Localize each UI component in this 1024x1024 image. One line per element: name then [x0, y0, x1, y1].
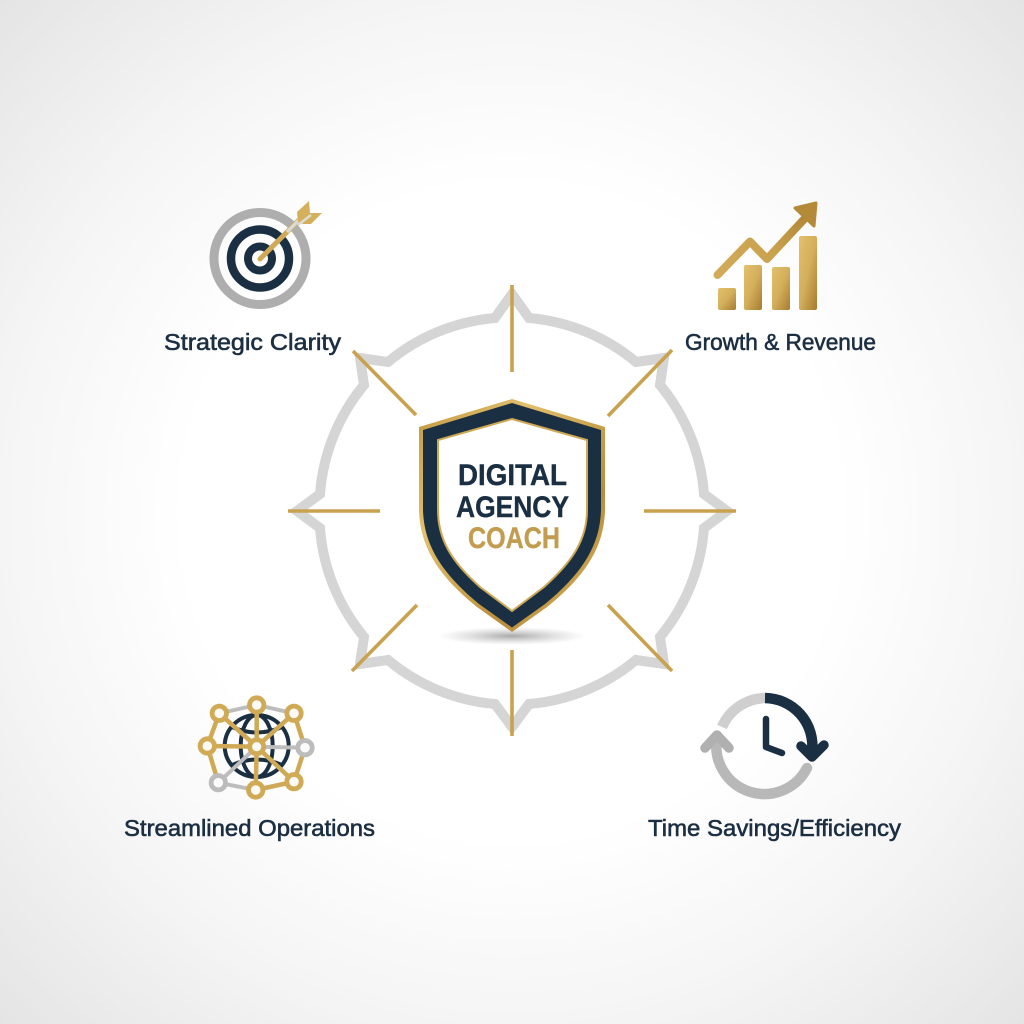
icon: network globe: [200, 698, 312, 797]
label: Streamlined Operations: Streamlined Operations: [124, 815, 375, 841]
compass ring with eight points: [297, 294, 727, 727]
shield title: [456, 459, 569, 555]
globe: [225, 715, 289, 777]
icon: growth bar chart with arrow: [718, 203, 817, 310]
shield shadow: [438, 627, 586, 645]
network links: [207, 705, 305, 790]
shield inner gold line: [438, 419, 587, 611]
label: Time Savings/Efficiency: Time Savings/Efficiency: [648, 815, 901, 841]
shield title: AGENCY: [456, 491, 569, 524]
network nodes: [200, 698, 301, 797]
label: Growth & Revenue: Growth & Revenue: [685, 329, 876, 355]
shield title: COACH: [468, 522, 560, 555]
icon: target with arrow: [214, 201, 322, 304]
icon: clock with circular arrows: [705, 698, 824, 794]
gold compass spokes: [288, 285, 736, 736]
shield title: DIGITAL: [458, 459, 567, 492]
central shield badge: [419, 399, 605, 632]
shield navy band: [423, 403, 601, 628]
shield gold rim: [419, 399, 605, 632]
label: Strategic Clarity: Strategic Clarity: [164, 329, 341, 355]
